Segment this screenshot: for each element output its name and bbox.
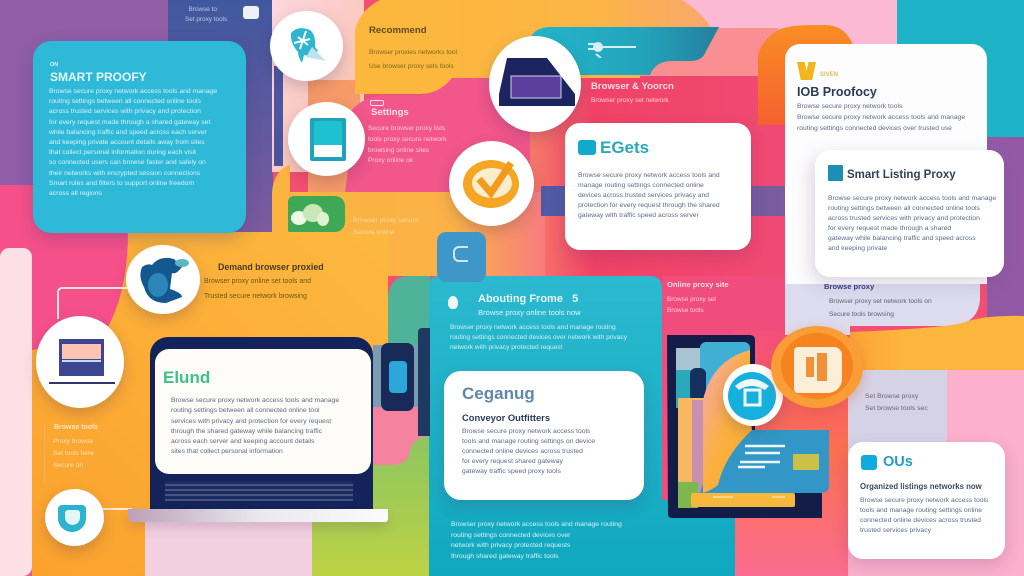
- device with credit card: [667, 335, 829, 518]
- lines: Proxy browse Set tools here Secure on: [53, 438, 94, 469]
- icon: orange check circle: [449, 141, 534, 226]
- lines: Secure browser proxy lists tools proxy secure network browsing online sites Proxy online ok: [368, 125, 446, 164]
- text block: lower left: [44, 424, 114, 484]
- dark stand: [418, 328, 430, 436]
- text block: Browse secure proxy network access tools and manage routing settings between all connected online tools across trusted services with privacy and protection for every request made through a shared gateway set while balancing traffic and speed across each server and keeping private account details away from sites that collect personal information during each visit so connected users can browse faster and safely on their networks with encrypted session connections Smart rules and filters to support online freedom across all regions: [49, 88, 217, 197]
- label: ON: [50, 62, 58, 68]
- icon: outline: [370, 100, 384, 106]
- text block: Browse secure proxy network access tools tools and manage routing settings online connected online devices across trusted trusted services privacy: [860, 497, 988, 534]
- panel: IDE proxy: [785, 44, 987, 284]
- heading: Online proxy site: [667, 280, 729, 289]
- connector line to laptop circle: [57, 287, 127, 319]
- heading: Abouting Frome 5: [478, 293, 578, 305]
- icon: blue chip: [861, 455, 877, 470]
- panel: smart listing proxy: [815, 150, 1004, 277]
- screen card: [155, 349, 371, 474]
- icon: phone: [381, 343, 414, 411]
- icon: cloud globe circle: [126, 245, 200, 314]
- panel: laptop with brand: [150, 337, 373, 509]
- lines: Browser proxy set network tools on Secure tools browsing: [829, 298, 932, 318]
- text block: small right: Set Browse proxy Set browse tools sec: [865, 393, 928, 412]
- lines: Browser proxy online set tools and Trusted secure network browsing: [204, 278, 311, 300]
- tablet screen: [676, 342, 750, 508]
- icon: green cloud tile: [288, 196, 345, 232]
- icon: house shield circle: [723, 364, 783, 426]
- swoosh: [703, 350, 752, 493]
- text block: Browse secure proxy network access tools and manage routing settings between all connected online tools across trusted services with privacy and protection for every request made through a shared gateway while balancing traffic and speed across and keeping private: [828, 195, 996, 252]
- icon: blue tile: [828, 165, 843, 181]
- text block: Browse secure proxy network tools Browse secure proxy network access tools and manage routing settings connected devices over trusted use: [797, 103, 965, 132]
- white card: [444, 371, 644, 500]
- text block: recommend: [369, 25, 457, 70]
- tablet body: [667, 335, 822, 518]
- icon: laptop browser circle: [489, 36, 581, 132]
- heading: Ceganug: [462, 384, 535, 403]
- text block: top navy caption: Browse to Set proxy tools: [185, 6, 227, 23]
- panel: smart proxy: [33, 41, 246, 233]
- icon: small badge: [243, 6, 259, 19]
- lines: Browser proxies networks tool Use browser proxy sets tools: [369, 49, 457, 70]
- text block: below smart listing: [824, 282, 932, 318]
- icon: blue chip: [578, 140, 596, 155]
- subheading: Browser proxy set network: [591, 97, 669, 104]
- heading: Demand browser proxied: [218, 262, 324, 272]
- text block: browser proxy: [591, 81, 674, 104]
- lines: Browse proxy set Browse tools: [667, 296, 716, 314]
- heading: Browser & Yoorcn: [591, 81, 674, 92]
- subheading: Organized listings networks now: [860, 482, 982, 491]
- icon: shield circle: [45, 489, 104, 546]
- icon: yellow flag: [797, 62, 816, 80]
- connector: shield to laptop: [100, 508, 132, 510]
- text block: Browse secure proxy network access tools and manage routing settings between all connected online tool services with privacy and protection for every request through the shared gateway while balancing traffic across each server and keeping account details sites that collect personal information: [171, 397, 339, 455]
- text block: right of main panel: [667, 280, 729, 314]
- panel: eGets: [565, 123, 751, 250]
- heading: Browse proxy: [824, 282, 874, 291]
- subheading: Browse proxy online tools now: [478, 308, 581, 317]
- text block: Browse secure proxy network access tools tools and manage routing settings on device connected online devices across trusted for every request shared gateway gateway traffic speed proxy tools: [462, 428, 595, 475]
- icon: tablet circle: [288, 102, 365, 176]
- heading: smart proxy: SMART PROOFY: [50, 70, 147, 84]
- text block: center left heading: [204, 262, 324, 300]
- text block: Browse secure proxy network access tools and manage routing settings connected online devices across trusted services privacy and protection for every request through the shared gateway with traffic speed across server: [578, 172, 720, 219]
- credit card: [700, 430, 829, 493]
- heading: Smart Listing Proxy: [847, 169, 956, 181]
- heading: IOB Proofocy: [797, 85, 877, 99]
- text block: small orange: Browser proxy secure Secure online: [353, 217, 419, 236]
- icon: blue tile above main panel: [437, 232, 486, 282]
- label: SIVEN: [820, 72, 838, 78]
- heading: EGets: [600, 138, 649, 157]
- text block: Browser proxy network access tools and manage routing routing settings connected devices over network with privacy network with privacy protected request: [450, 324, 627, 351]
- heading: Browse tools: [54, 424, 98, 431]
- subheading: Conveyor Outfitters: [462, 412, 550, 423]
- yellow card: [691, 493, 795, 507]
- text block: settings: [368, 100, 446, 164]
- heading: Recommend: [369, 25, 427, 36]
- text block: Browser proxy network access tools and manage routing routing settings connected devices over network with privacy protected requests through shared gateway traffic tools: [451, 521, 622, 560]
- icon: orange book circle: [771, 326, 863, 408]
- panel: main teal: [440, 293, 648, 560]
- heading: Settings: [371, 107, 409, 118]
- icon: bulb: [448, 296, 458, 309]
- laptop base: [128, 509, 388, 522]
- keyboard strip: [165, 481, 353, 501]
- icon: laptop circle: [36, 316, 124, 408]
- heading: OUs: [883, 454, 913, 470]
- heading: Elund: [163, 368, 210, 387]
- icon: blue leaf circle: [270, 11, 343, 81]
- panel: OUs: [848, 442, 1005, 559]
- icon: key on teal ribbon: [588, 42, 636, 58]
